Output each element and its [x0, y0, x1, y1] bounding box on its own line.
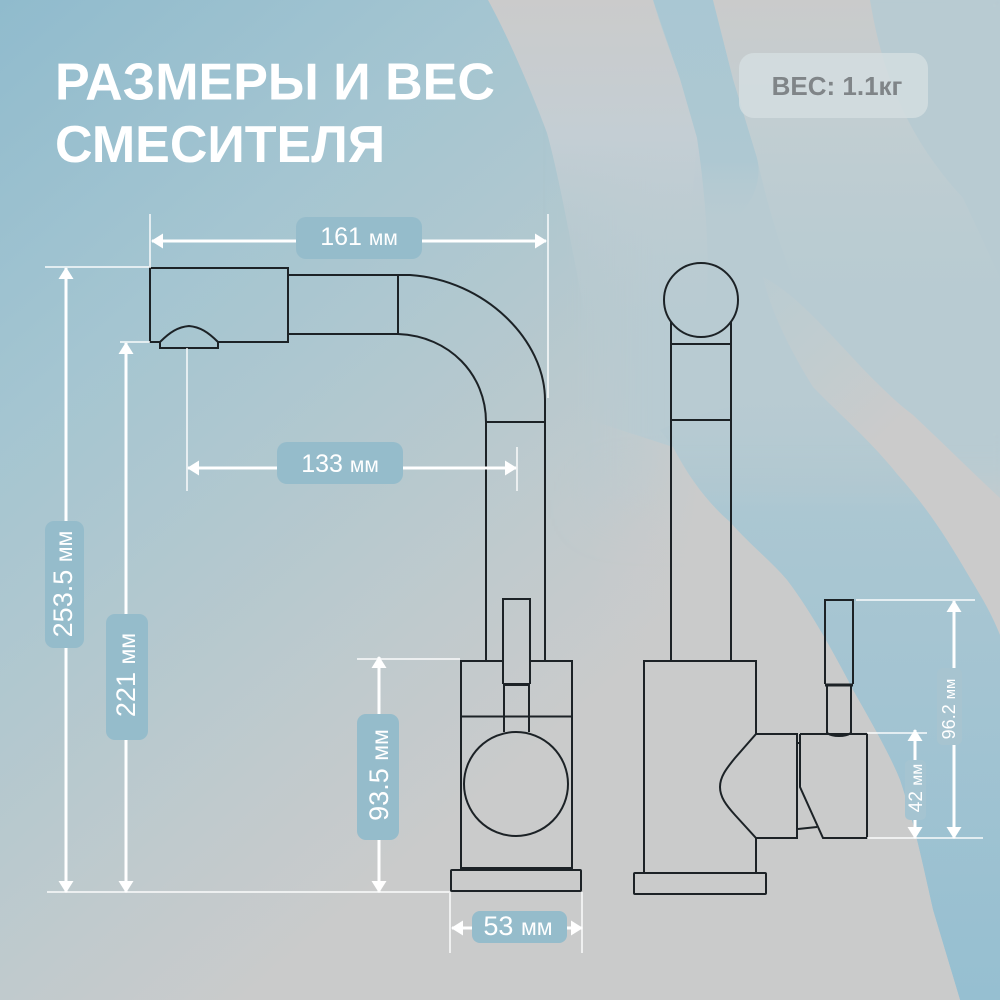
base — [451, 870, 581, 891]
dimension: 96.2 мм: 96.2 мм — [939, 679, 959, 739]
riser — [671, 322, 731, 661]
dimension: 93.5 мм — [357, 657, 399, 892]
dimension: 42 мм: 42 мм — [906, 764, 927, 812]
dimension: 42 мм — [905, 730, 927, 838]
title: РАЗМЕРЫ И ВЕС — [55, 54, 495, 112]
title: СМЕСИТЕЛЯ — [55, 116, 385, 174]
riser — [486, 422, 545, 661]
aerator — [160, 326, 218, 348]
round handle — [464, 732, 568, 836]
faucet front view drawing — [150, 268, 581, 891]
weight badge: ВЕС: 1.1кг — [772, 71, 903, 101]
dimension: 221 мм: 221 мм — [111, 633, 141, 717]
dimension: 221 мм — [106, 343, 148, 892]
spout head — [150, 268, 288, 342]
dimension: 161 мм: 161 мм — [320, 223, 398, 251]
dimension: 96.2 мм — [937, 601, 962, 838]
dimension: 253.5 мм: 253.5 мм — [48, 531, 78, 637]
spout end circle — [664, 263, 738, 337]
spout tube — [288, 275, 545, 422]
dimension: 161 мм — [152, 217, 546, 259]
dimension: 133 мм — [188, 442, 516, 484]
body — [461, 661, 572, 868]
base — [634, 873, 766, 894]
handle — [720, 734, 797, 838]
dimension: 253.5 мм — [45, 268, 84, 892]
extension lines — [45, 214, 983, 953]
body — [644, 661, 756, 872]
lever — [503, 599, 530, 684]
lever — [825, 600, 853, 684]
dimension: 53 мм: 53 мм — [483, 911, 553, 941]
weight badge — [739, 53, 928, 118]
dimension: 133 мм: 133 мм — [301, 450, 379, 478]
faucet side view drawing — [634, 263, 867, 894]
dimension: 93.5 мм: 93.5 мм — [364, 729, 394, 821]
dimension: 53 мм — [452, 911, 582, 943]
